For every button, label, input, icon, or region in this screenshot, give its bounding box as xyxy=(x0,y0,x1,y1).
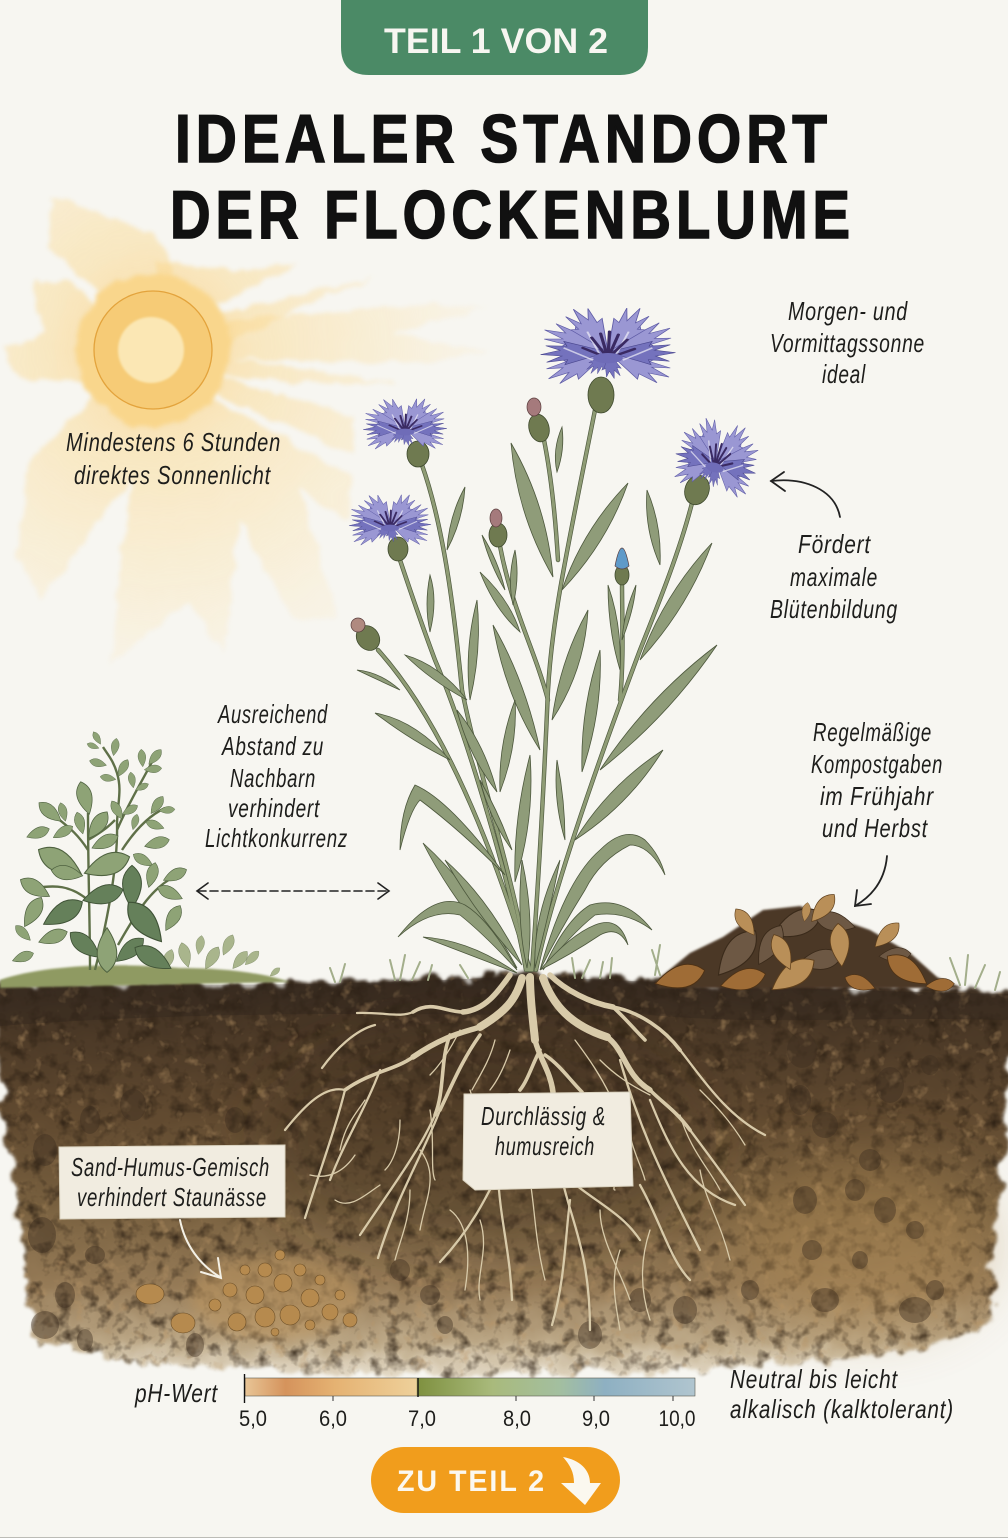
text: morning sun note: Vormittagssonne xyxy=(770,328,925,358)
soil colour: dark zone around roots xyxy=(260,1030,700,1250)
pH numbers: 8,0 xyxy=(503,1406,531,1431)
pH numbers: 10,0 xyxy=(658,1406,696,1431)
pH numbers: 6,0 xyxy=(319,1406,347,1431)
pH note: Neutral bis leicht xyxy=(730,1364,899,1394)
text: compost note: im Frühjahr xyxy=(820,781,934,811)
compost: tan leaves xyxy=(730,890,904,999)
label: sand humus xyxy=(59,1145,285,1219)
tab: part label: TEIL 1 VON 2 xyxy=(384,22,608,61)
soil colour: orange sand lower right xyxy=(730,1160,990,1330)
illustration: flower heads xyxy=(347,303,770,655)
arrow: spacing double arrow xyxy=(197,883,389,899)
text: morning sun note: Morgen- und xyxy=(788,296,908,326)
tab: part label xyxy=(341,0,648,75)
label: soil drainage xyxy=(463,1092,633,1190)
text: compost note xyxy=(811,717,943,843)
flower head: right xyxy=(666,407,770,506)
text: compost note: Kompostgaben xyxy=(811,749,943,779)
pH bar xyxy=(244,1374,695,1403)
text: morning sun note xyxy=(770,296,925,389)
sun disc xyxy=(76,273,230,427)
text: spacing note xyxy=(205,699,348,853)
illustration: neighbour plant xyxy=(0,730,290,988)
arrow: to compost xyxy=(855,856,887,906)
text: morning sun note: ideal xyxy=(822,359,866,389)
label: soil drainage: humusreich xyxy=(495,1131,595,1161)
icon: down arrow xyxy=(561,1457,601,1505)
text: bloom note: Blütenbildung xyxy=(770,594,898,624)
illustration: compost pile xyxy=(652,890,962,999)
soil stones xyxy=(28,1032,944,1357)
pH numbers: 9,0 xyxy=(582,1406,610,1431)
text: bloom note xyxy=(770,529,898,624)
illustration: roots xyxy=(285,975,765,1330)
arrow: to sand xyxy=(180,1220,221,1278)
low ground cover xyxy=(160,933,282,978)
label: sand humus: verhindert Staunässe xyxy=(77,1182,267,1212)
title xyxy=(170,101,855,253)
text: sunlight note xyxy=(66,427,281,490)
calyxes and buds xyxy=(352,377,713,655)
text: spacing note: Abstand zu xyxy=(221,731,324,761)
pH note xyxy=(730,1364,954,1424)
button: to part 2 xyxy=(371,1447,620,1513)
pH label: pH-Wert xyxy=(134,1378,219,1408)
text: bloom note: Fördert xyxy=(798,529,872,559)
pH numbers: 7,0 xyxy=(408,1406,436,1431)
label: soil drainage: Durchlässig & xyxy=(481,1101,606,1131)
illustration: soil cross section xyxy=(0,974,1008,1376)
bottom edge line xyxy=(0,1537,1008,1538)
pH numbers xyxy=(239,1406,696,1431)
compost: rust leaves xyxy=(652,948,955,996)
bud tips xyxy=(351,398,629,632)
text: sunlight note: direktes Sonnenlicht xyxy=(74,460,272,490)
text: compost note: und Herbst xyxy=(822,813,929,843)
soil top rough band xyxy=(0,976,1008,1026)
text: spacing note: Nachbarn xyxy=(230,763,316,793)
illustration: grass tufts xyxy=(330,945,1000,990)
text: compost note: Regelmäßige xyxy=(813,717,932,747)
text: spacing note: verhindert xyxy=(228,793,321,823)
label: sand humus: Sand-Humus-Gemisch xyxy=(71,1152,270,1182)
flower head: lower left xyxy=(347,491,433,548)
title: DER FLOCKENBLUME xyxy=(170,177,855,253)
title: IDEALER STANDORT xyxy=(175,101,832,177)
arrow: to flower xyxy=(771,472,840,517)
illustration: sun xyxy=(0,197,487,663)
pH numbers: 5,0 xyxy=(239,1406,267,1431)
illustration: cornflower stems xyxy=(378,410,692,970)
text: spacing note: Lichtkonkurrenz xyxy=(205,823,348,853)
pH note: alkalisch (kalktolerant) xyxy=(730,1394,954,1424)
pH scale xyxy=(134,1364,954,1431)
text: spacing note: Ausreichend xyxy=(217,699,328,729)
illustration: cornflower leaves xyxy=(357,427,717,973)
illustration: sand stones xyxy=(136,1250,360,1340)
compost: grey-brown leaves xyxy=(709,902,912,983)
text: sunlight note: Mindestens 6 Stunden xyxy=(66,427,281,457)
text: bloom note: maximale xyxy=(790,562,878,592)
flower head: upper left xyxy=(361,395,449,452)
button: to part 2: ZU TEIL 2 xyxy=(397,1465,546,1498)
flower head: top xyxy=(537,303,679,388)
